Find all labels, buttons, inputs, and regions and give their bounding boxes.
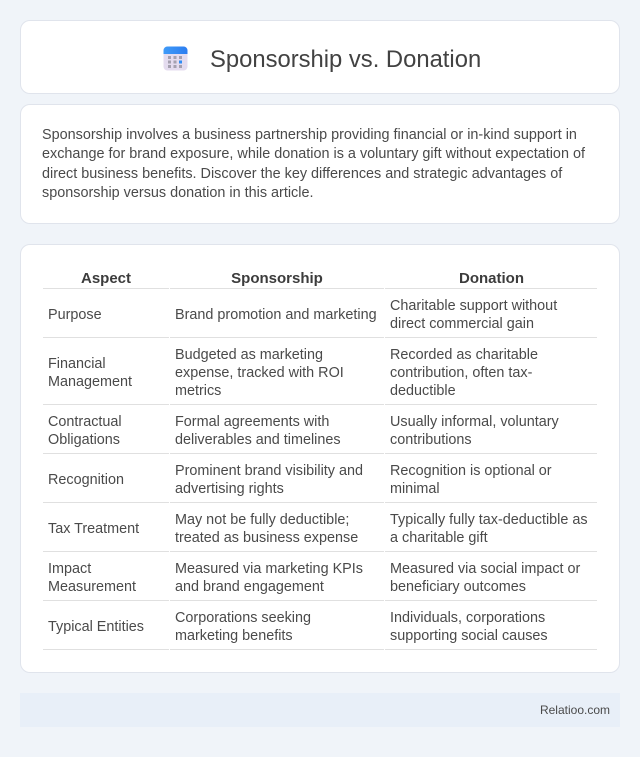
text: and brand engagement — [175, 579, 324, 595]
title card — [20, 20, 620, 94]
text: Typically fully tax-deductible as — [390, 512, 588, 528]
row: Impact Measurement: Measurement — [48, 579, 136, 595]
text: supporting social causes — [390, 628, 548, 644]
text: Measured via marketing KPIs — [175, 561, 363, 577]
text: Charitable support without — [390, 298, 557, 314]
row: Impact Measurement: Impact — [48, 561, 91, 577]
intro text: exchange for brand exposure, while donation is a voluntary gift without expectation of — [42, 146, 585, 162]
text: deductible — [390, 383, 456, 399]
icon: calendar — [164, 46, 188, 70]
table header: Aspect — [81, 270, 131, 287]
row: Purpose: Purpose — [48, 307, 102, 323]
text: Individuals, corporations — [390, 610, 545, 626]
intro text panel — [20, 104, 620, 224]
text: contributions — [390, 432, 472, 448]
table header: Sponsorship — [231, 270, 323, 287]
text: minimal — [390, 481, 440, 497]
row: Contractual Obligations — [48, 414, 122, 448]
text: Recognition is optional or — [390, 463, 552, 479]
table panel — [20, 244, 620, 673]
row: Financial Management: Financial — [48, 356, 106, 372]
text: Formal agreements with — [175, 414, 329, 430]
title: Sponsorship vs. Donation — [210, 46, 481, 73]
text: Prominent brand visibility and — [175, 463, 363, 479]
text: metrics — [175, 383, 221, 399]
text: Budgeted as marketing — [175, 347, 323, 363]
text: Recorded as charitable — [390, 347, 538, 363]
row: Contractual Obligations: Contractual — [48, 414, 122, 430]
text: treated as business expense — [175, 530, 358, 546]
intro text: Sponsorship involves a business partnership providing financial or in-kind support in — [42, 126, 577, 142]
text: contribution, often tax- — [390, 365, 532, 381]
text: direct commercial gain — [390, 316, 534, 332]
footer bar — [20, 693, 620, 727]
footer credit: Relatioo.com — [540, 703, 610, 717]
text: marketing benefits — [175, 628, 293, 644]
text: Corporations seeking — [175, 610, 311, 626]
row: Contractual Obligations: Obligations — [48, 432, 120, 448]
text: a charitable gift — [390, 530, 488, 546]
row: Financial Management: Management — [48, 374, 132, 390]
text: expense, tracked with ROI — [175, 365, 344, 381]
row: Tax Treatment: Tax Treatment — [48, 521, 139, 537]
intro text: sponsorship versus donation in this article. — [42, 185, 313, 201]
text: advertising rights — [175, 481, 284, 497]
text: Measured via social impact or — [390, 561, 580, 577]
intro text: direct business benefits. Discover the key differences and strategic advantages of — [42, 166, 562, 182]
table header — [81, 270, 524, 287]
row: Impact Measurement — [48, 561, 136, 595]
row: Financial Management — [48, 356, 132, 390]
text: beneficiary outcomes — [390, 579, 526, 595]
row: Recognition: Recognition — [48, 472, 124, 488]
row: Typical Entities: Typical Entities — [48, 619, 144, 635]
table header: Donation — [459, 270, 524, 287]
text: Brand promotion and marketing — [175, 307, 377, 323]
intro text — [42, 126, 586, 201]
text: Usually informal, voluntary — [390, 414, 559, 430]
text: deliverables and timelines — [175, 432, 341, 448]
text: May not be fully deductible; — [175, 512, 349, 528]
